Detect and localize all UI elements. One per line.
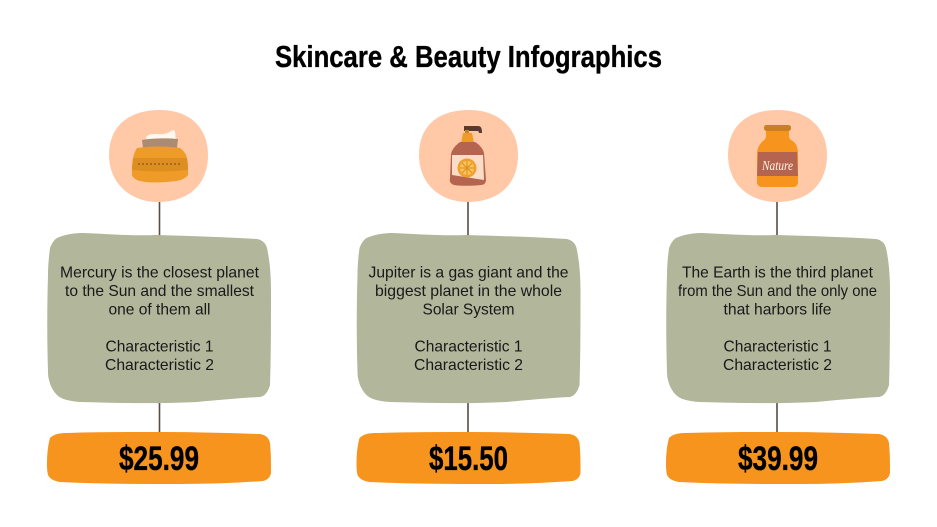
description text [678,264,877,374]
description text: Characteristic 2 [414,357,523,374]
title: Skincare & Beauty Infographics [275,39,662,74]
connector lines [158,200,160,434]
description text: Characteristic 1 [106,338,214,356]
description text: from the Sun and the only one [678,283,877,300]
icon background: peach blob [109,110,208,202]
column: jar product [47,110,271,484]
price: $15.50 [429,440,508,478]
connector lines [467,200,469,434]
icon background: peach blob [419,110,518,202]
price bar [666,432,890,484]
description text: Characteristic 1 [414,338,523,356]
description text [368,264,569,374]
icon: cream jar [132,130,188,182]
description text: Solar System [422,302,514,318]
description text [60,264,260,374]
connector lines [776,200,778,434]
description text: biggest planet in the whole [375,283,562,300]
description text: one of them all [108,302,210,318]
column: nature jar product [666,110,890,484]
description text: Jupiter is a gas giant and the [368,264,569,282]
icon background: peach blob [728,110,827,202]
price: $25.99 [119,440,199,478]
description text: Mercury is the closest planet [60,264,260,282]
description text: to the Sun and the smallest [65,283,255,300]
description text: Characteristic 2 [105,357,214,374]
panel: description [357,233,580,403]
panel: description [666,233,890,403]
icon: pump bottle [450,126,486,186]
price bar [47,432,271,484]
description text: Characteristic 1 [724,338,832,356]
icon: nature bottle: Nature [761,159,793,174]
icon: nature bottle [757,125,798,187]
description text: The Earth is the third planet [682,264,874,282]
price bar [356,432,580,484]
description text: that harbors life [724,302,832,318]
column: pump bottle product [356,110,580,484]
description text: Characteristic 2 [723,357,832,374]
price: $39.99 [738,440,818,478]
panel: description [47,233,271,403]
